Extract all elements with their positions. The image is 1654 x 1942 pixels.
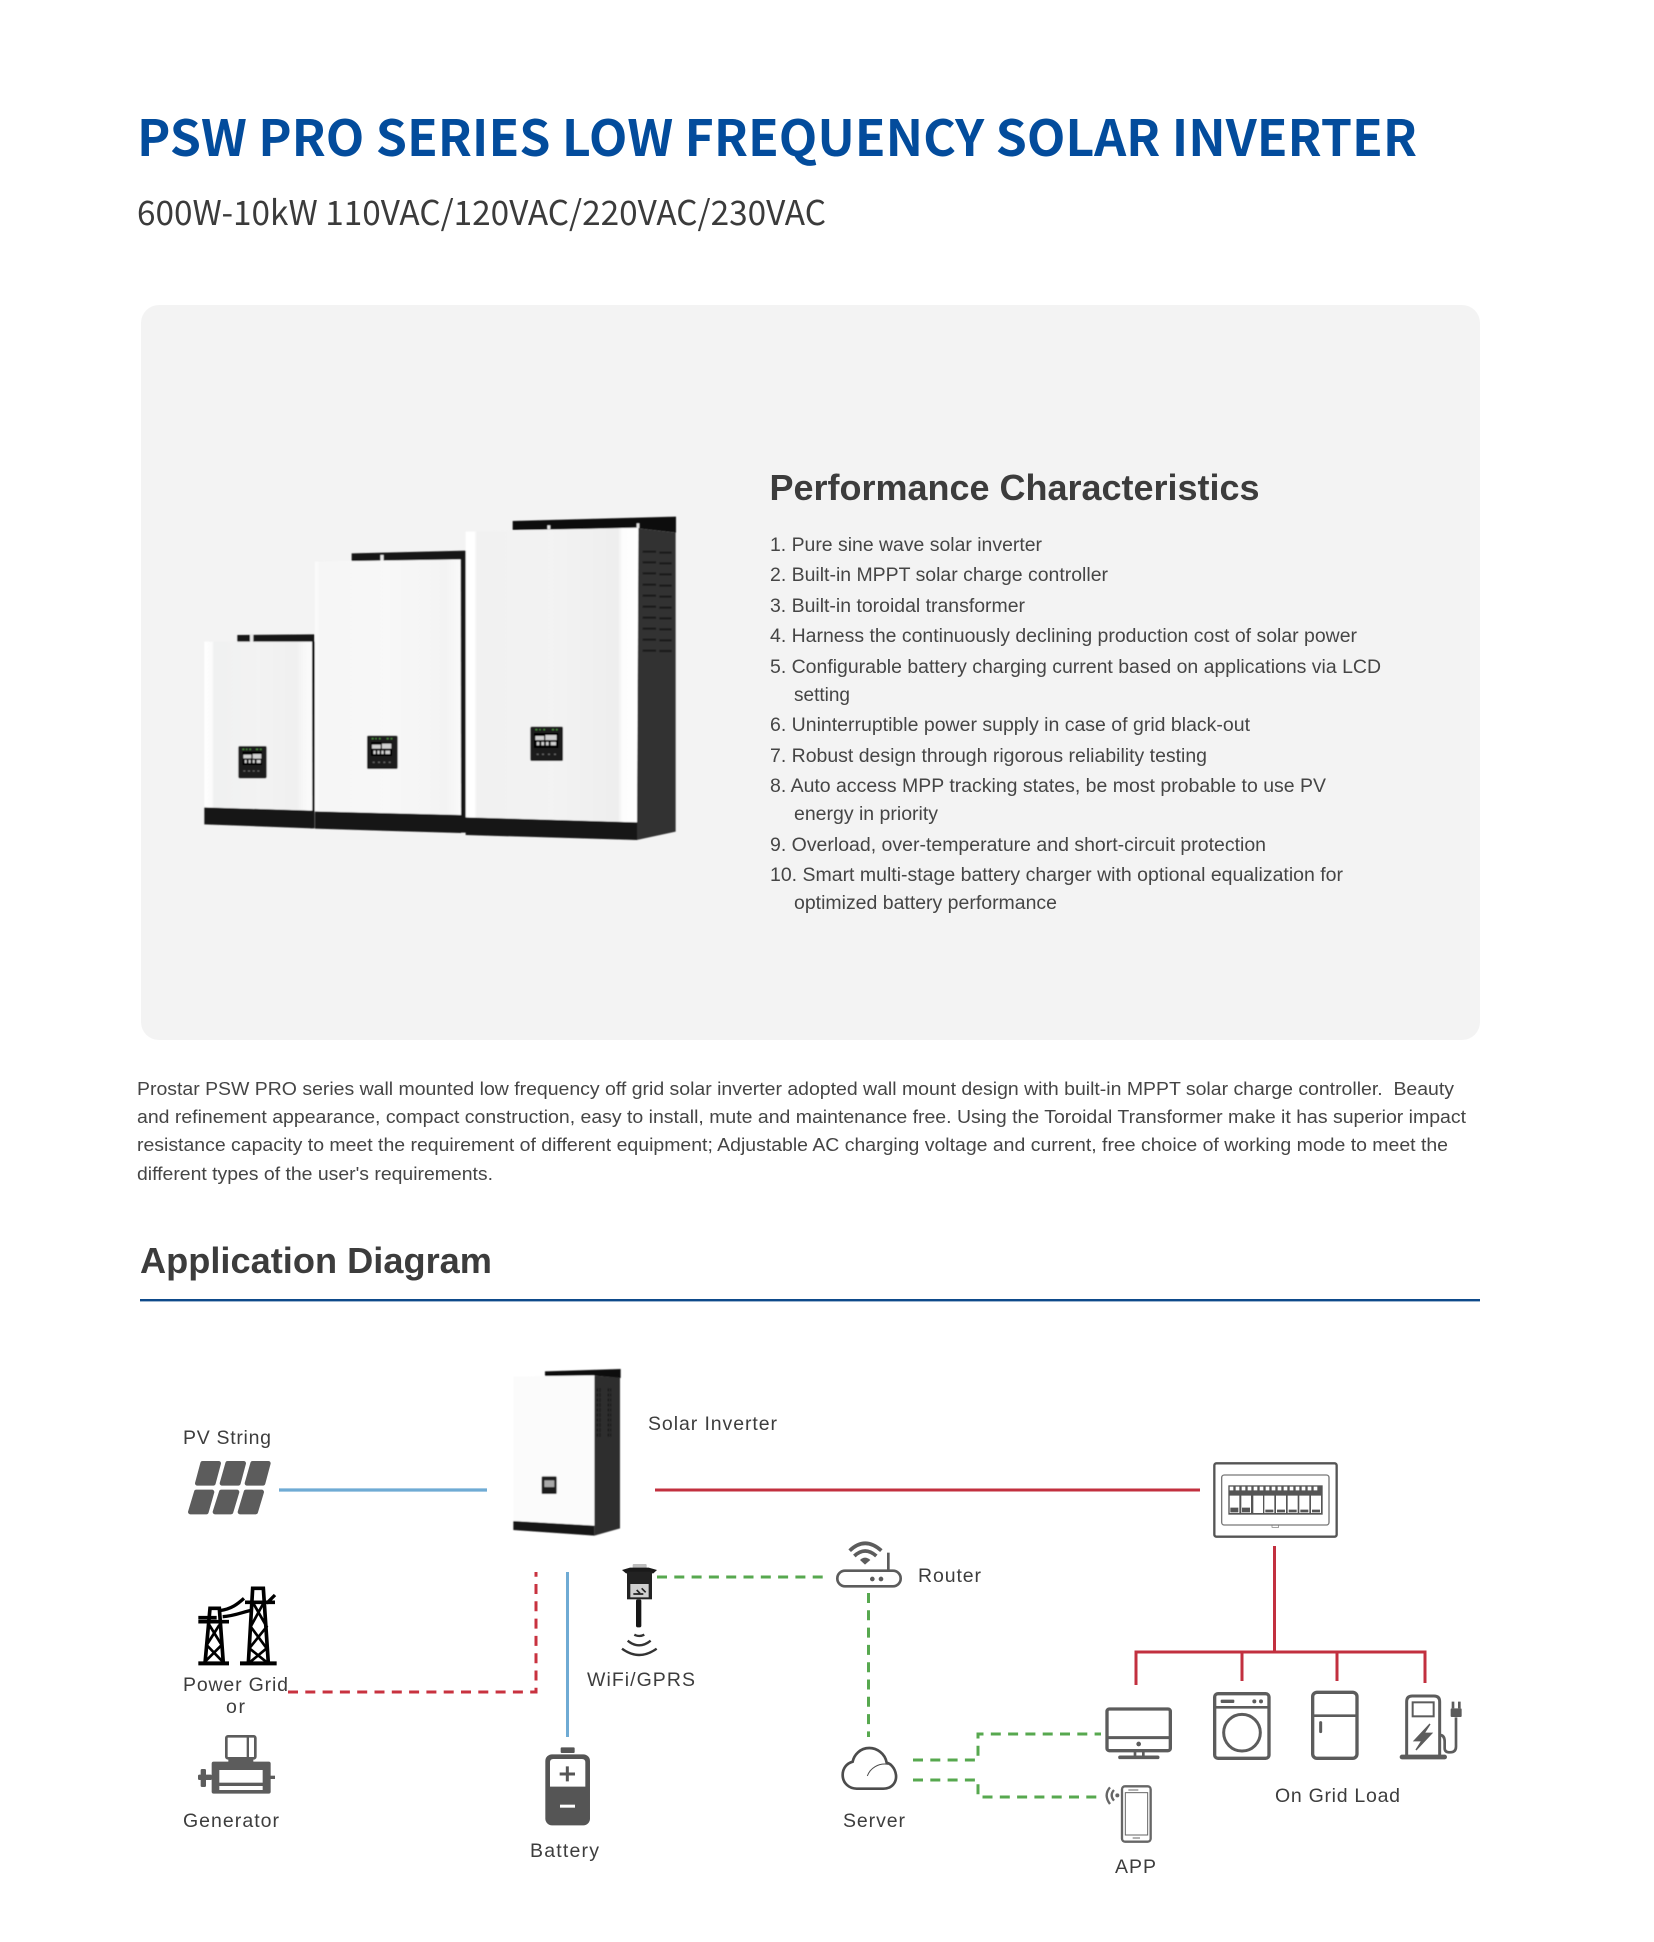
feature list: 2. Built-in MPPT solar charge controller	[770, 565, 1109, 586]
feature list: 6. Uninterruptible power supply in case of grid black-out	[770, 715, 1251, 736]
inverter: small	[204, 634, 315, 828]
connector: WiFi to router	[657, 1576, 823, 1578]
icon: power grid tower	[198, 1588, 277, 1663]
label: Power Grid: Power Grid	[183, 1674, 288, 1696]
connector: PV to inverter	[279, 1488, 487, 1492]
label: WiFi/GPRS: WiFi/GPRS	[587, 1669, 695, 1691]
label: APP: APP	[1115, 1856, 1156, 1878]
icon: solar panels	[190, 1463, 268, 1512]
panel: product and performance characteristics	[141, 305, 1480, 1040]
connector: grid to inverter	[288, 1572, 536, 1692]
feature list: 4. Harness the continuously declining production cost of solar power	[770, 626, 1358, 647]
label: Solar Inverter: Solar Inverter	[648, 1413, 778, 1435]
connector: router to server	[867, 1593, 870, 1737]
label: Battery: Battery	[530, 1840, 599, 1862]
inverter: large	[466, 517, 676, 840]
connector: distribution box to loads	[1136, 1546, 1425, 1685]
icon: monitor	[1107, 1709, 1170, 1757]
feature list: energy in priority	[794, 804, 939, 825]
application diagram	[183, 1369, 1462, 1878]
label: Generator: Generator	[183, 1810, 280, 1832]
connector: inverter to distribution box	[655, 1488, 1200, 1492]
icon: fridge	[1313, 1692, 1357, 1758]
description paragraph: Prostar PSW PRO series wall mounted low frequency off grid solar inverter adopted wall mount design with built-in MPPT solar charge controller. Beauty	[137, 1078, 1455, 1099]
icon: generator	[198, 1736, 275, 1794]
label: Server: Server	[843, 1810, 906, 1832]
feature list	[770, 535, 1381, 914]
icon: WiFi/GPRS module	[622, 1564, 657, 1655]
description paragraph: different types of the user's requirements.	[137, 1163, 493, 1184]
feature list: 5. Configurable battery charging current based on applications via LCD	[770, 657, 1381, 678]
label: On Grid Load: On Grid Load	[1275, 1785, 1400, 1807]
subtitle: 600W-10kW 110VAC/120VAC/220VAC/230VAC	[137, 186, 826, 235]
icon: washing machine	[1215, 1694, 1269, 1758]
inverter: medium	[315, 551, 466, 833]
connector: server to monitor	[913, 1734, 1101, 1760]
icon: phone	[1107, 1786, 1151, 1842]
heading: performance characteristics: Performance Characteristics	[770, 467, 1260, 508]
feature list: 7. Robust design through rigorous reliability testing	[770, 746, 1207, 767]
connector: battery to inverter	[566, 1572, 569, 1737]
feature list: 9. Overload, over-temperature and short-circuit protection	[770, 835, 1266, 856]
icon: distribution box	[1214, 1463, 1337, 1537]
connector: server to app	[913, 1780, 1101, 1797]
label: Router: Router	[918, 1565, 982, 1587]
feature list: 1. Pure sine wave solar inverter	[770, 535, 1043, 556]
icon: cloud server	[843, 1748, 896, 1789]
feature list: setting	[794, 685, 850, 706]
description paragraph	[137, 1078, 1467, 1184]
icon: router	[837, 1543, 901, 1586]
heading: application diagram: Application Diagram	[140, 1240, 492, 1281]
feature list: 3. Built-in toroidal transformer	[770, 596, 1026, 617]
title: PSW PRO SERIES LOW FREQUENCY SOLAR INVERTER	[137, 99, 1417, 171]
feature list: 8. Auto access MPP tracking states, be most probable to use PV	[770, 776, 1326, 797]
description paragraph: resistance capacity to meet the requirement of different equipment; Adjustable AC charging voltage and current, free choice of working mode to meet the	[137, 1134, 1448, 1155]
description paragraph: and refinement appearance, compact construction, easy to install, mute and maintenance free. Using the Toroidal Transformer make it has superior impact	[137, 1106, 1467, 1127]
icon: EV charger	[1402, 1696, 1462, 1757]
label: PV String: PV String	[183, 1427, 271, 1449]
icon: battery	[545, 1747, 590, 1825]
label: or: or	[226, 1696, 246, 1718]
feature list: optimized battery performance	[794, 893, 1057, 914]
icon: solar inverter	[513, 1369, 621, 1536]
feature list: 10. Smart multi-stage battery charger with optional equalization for	[770, 865, 1344, 886]
product image: three inverters	[204, 517, 676, 840]
